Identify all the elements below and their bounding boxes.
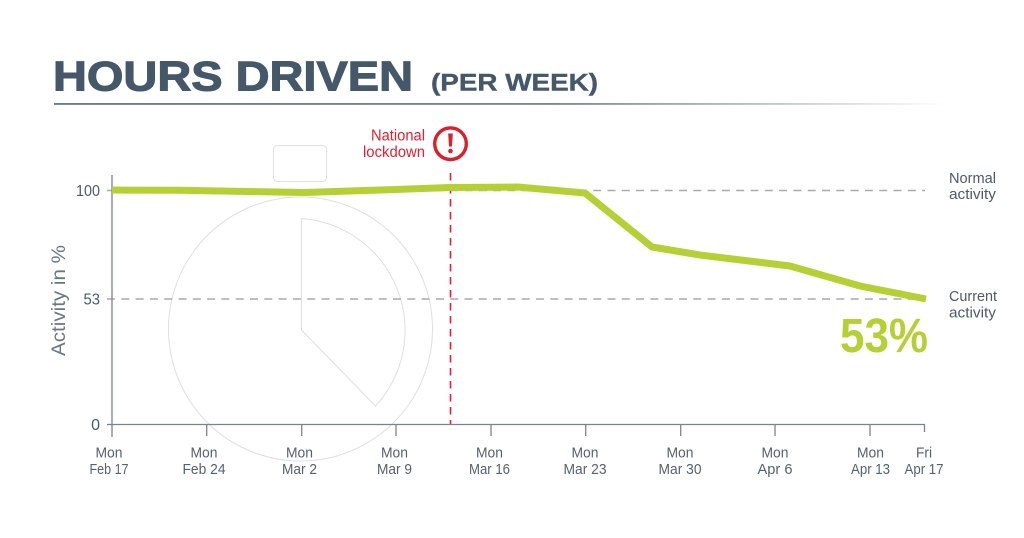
lockdown label: lockdown xyxy=(363,144,425,161)
normal activity label: activity xyxy=(949,186,997,203)
y-axis values: 53 xyxy=(84,292,100,308)
y-axis title: Activity in % xyxy=(49,245,70,356)
normal activity label xyxy=(949,170,997,203)
x-axis labels: Mar 16 xyxy=(469,461,510,478)
x-axis labels: Mon xyxy=(666,444,694,462)
current activity label xyxy=(949,288,998,322)
x-axis labels: Apr 13 xyxy=(851,461,890,478)
y-axis values: 100 xyxy=(76,183,100,200)
x-axis labels: Mon xyxy=(572,444,598,462)
x-axis labels: Mar 2 xyxy=(282,461,317,478)
x-axis labels: Apr 6 xyxy=(758,461,792,478)
x-axis labels: Mar 9 xyxy=(377,461,412,478)
lockdown marker line xyxy=(450,173,452,424)
x-axis labels: Fri xyxy=(916,444,932,462)
current value callout: 53% xyxy=(840,310,928,363)
x-axis labels: Mon xyxy=(286,444,313,462)
icon: exclamation alert xyxy=(435,128,466,160)
current activity label: Current xyxy=(949,288,998,305)
reference dashed lines xyxy=(107,190,925,299)
x-axis labels: Mar 23 xyxy=(564,461,606,478)
y-axis values: 0 xyxy=(91,417,100,434)
x-axis labels: Mar 30 xyxy=(658,461,702,478)
y-axis values xyxy=(76,183,100,434)
x-axis labels: Mon xyxy=(96,444,122,462)
x-axis labels: Mon xyxy=(190,444,218,462)
current activity label: activity xyxy=(949,304,997,322)
normal activity label: Normal xyxy=(949,170,996,187)
title: (PER WEEK) xyxy=(431,70,598,96)
lockdown label xyxy=(363,128,425,161)
lockdown label: National xyxy=(371,128,425,145)
title xyxy=(53,52,598,99)
x-axis labels: Mon xyxy=(476,444,503,462)
x-axis labels: Apr 17 xyxy=(904,461,944,478)
x-axis labels: Mon xyxy=(762,444,788,462)
activity line xyxy=(112,187,926,299)
chart axes xyxy=(107,175,925,437)
x-axis labels: Feb 24 xyxy=(182,461,226,478)
x-axis labels xyxy=(90,444,944,478)
x-axis labels: Mon xyxy=(857,444,884,462)
ghost stopwatch outline xyxy=(168,146,432,461)
title: HOURS DRIVEN xyxy=(53,52,413,99)
x-axis labels: Feb 17 xyxy=(90,461,128,478)
x-axis labels: Mon xyxy=(381,444,408,462)
